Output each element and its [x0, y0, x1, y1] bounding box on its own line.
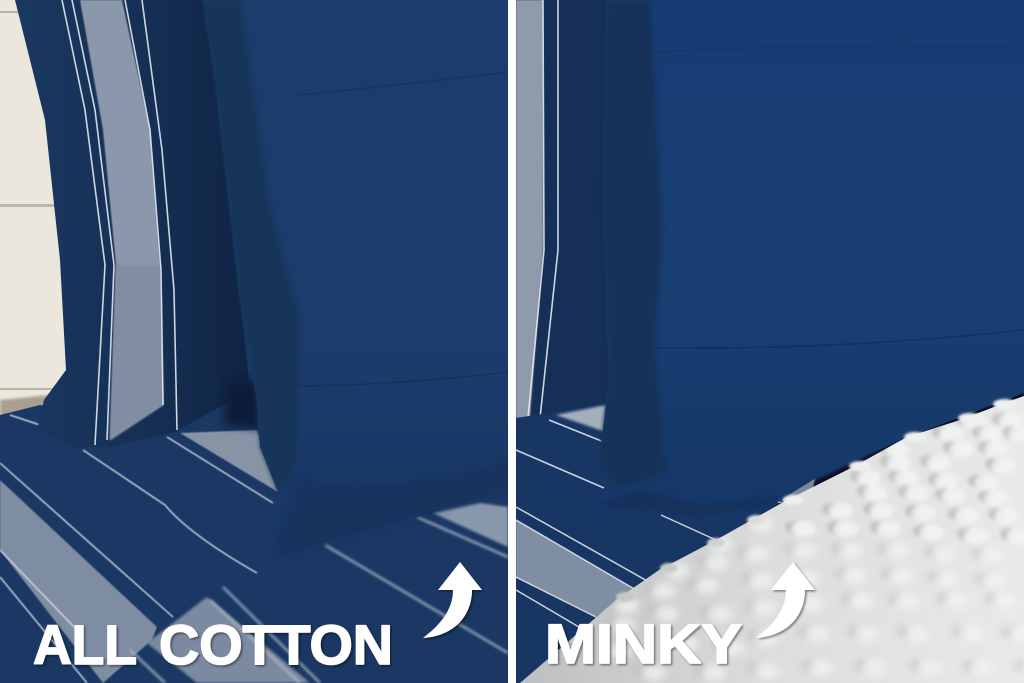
wall planks: [0, 0, 66, 415]
minky blanket: [520, 396, 1024, 683]
front pillow right: [588, 0, 1024, 515]
label: all cotton: ALL: [33, 613, 137, 676]
label: minky: MINKY: [545, 612, 742, 675]
minky dots near: [785, 413, 1024, 544]
icon: curved arrow right: [756, 562, 815, 638]
panel: minky photo: [516, 0, 1024, 683]
blanket with stripes: [0, 405, 510, 683]
back pillow right: [516, 0, 610, 420]
label: all cotton: COTTON: [159, 613, 393, 676]
front pillow: [203, 0, 510, 557]
minky dots far: [601, 516, 1024, 681]
label: all cotton: [33, 613, 393, 676]
minky edge bumps: [616, 399, 1017, 602]
back pillow: [15, 0, 250, 447]
shadow under pillow: [760, 390, 1024, 517]
icon: curved arrow left: [423, 562, 482, 638]
dark gap between pillows: [225, 380, 260, 430]
wrinkle shading: [300, 466, 506, 546]
panel: all cotton photo: [0, 0, 510, 683]
blanket right with stripes: [516, 404, 783, 628]
